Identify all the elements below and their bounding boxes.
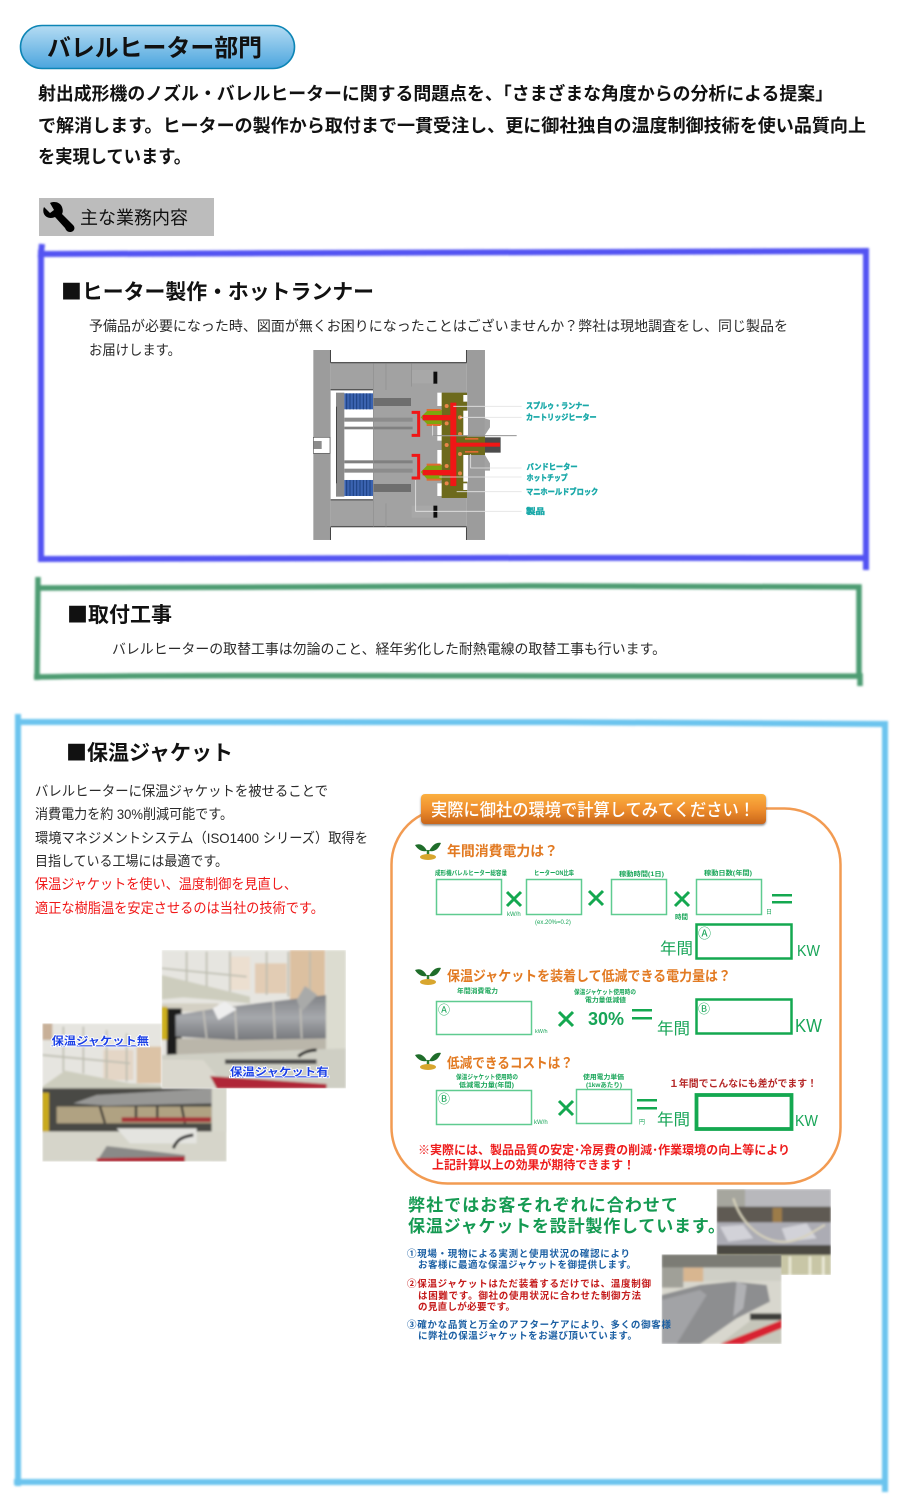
step 3: reducible cost: kW/h — [534, 1120, 548, 1126]
step 2: reducible power: kW/h — [535, 1029, 548, 1035]
step 1: annual power consumption: 日 — [766, 909, 772, 916]
photo: with jacket: 保温ジャケット有 — [230, 1065, 329, 1078]
note in red — [418, 1142, 790, 1172]
step 2: reducible power: 保温ジャケットを装着して低減できる電力量は？ — [447, 968, 731, 984]
icon: sprout — [415, 843, 441, 860]
diagram: hot runner mould cross-section — [313, 350, 598, 540]
body text — [89, 318, 788, 358]
section label: main services: 主な業務内容 — [80, 208, 188, 228]
step 1: annual power consumption: 年間消費電力は？ — [447, 843, 558, 859]
step 3: reducible cost: (1kwあたり) — [586, 1080, 622, 1089]
step 2: reducible power: 年間消費電力 — [457, 986, 498, 995]
body text — [35, 783, 368, 916]
intro text: で解消します。ヒーターの製作から取付まで一貫受注し、更に御社独自の温度制御技術を使い品質向上 — [38, 115, 866, 136]
panel: installation work — [34, 577, 860, 686]
step 2: reducible power: 保温ジャケット使用時の — [574, 987, 636, 996]
heading: insulation jacket: ■保温ジャケット — [66, 737, 233, 767]
diagram: hot runner mould cross-section: スプルゥ・ランナー — [526, 401, 589, 410]
photo: jacketed machine, top right — [717, 1189, 831, 1275]
step 3: reducible cost — [415, 1053, 819, 1130]
photo: with jacket — [162, 950, 346, 1088]
step 3: reducible cost: 保温ジャケット使用時の — [456, 1072, 518, 1081]
photo: jacketed barrel, lower — [662, 1254, 782, 1344]
step 2: reducible power: 電力量低減値 — [585, 995, 627, 1004]
calculator header banner: 実際に御社の環境で計算してみてください！ — [431, 800, 755, 820]
title pill — [20, 26, 294, 68]
point 3: ③確かな品質と万全のアフターケアにより、多くの御客様 — [407, 1319, 671, 1331]
note in red: ※実際には、製品品質の安定･冷房費の削減･作業環境の向上等により — [418, 1142, 790, 1157]
step 1: annual power consumption: 稼動時間(1日) — [619, 869, 664, 878]
step 3: reducible cost: 年間 — [657, 1111, 690, 1129]
step 1: annual power consumption: kW/h — [507, 912, 521, 918]
photo: without jacket — [42, 1023, 227, 1162]
step 3: reducible cost: 円 — [639, 1119, 645, 1126]
icon: wrench — [43, 202, 74, 232]
step 3: reducible cost: Ⓑ — [438, 1092, 450, 1106]
point 1: ①現場・現物による実測と使用状況の確認により — [407, 1248, 630, 1260]
step 1: annual power consumption: 稼動日数(年間) — [704, 868, 752, 877]
step 3: reducible cost: 使用電力単価 — [583, 1072, 625, 1081]
body text: お届けします。 — [89, 342, 181, 358]
step 1: annual power consumption: Ⓐ — [698, 926, 711, 941]
body text: 保温ジャケットを使い、温度制御を見直し、 — [35, 876, 297, 892]
icon: sprout — [415, 968, 441, 985]
point 3 — [407, 1319, 671, 1342]
body text: 予備品が必要になった時、図面が無くお困りになったことはございませんか？弊社は現地調査をし、同じ製品を — [89, 318, 788, 334]
panel: heater production and hot runner — [41, 244, 866, 570]
diagram: hot runner mould cross-section: マニホールドブロック — [526, 486, 598, 496]
step 3: reducible cost: KW — [795, 1113, 819, 1130]
panel: insulation jacket — [14, 714, 885, 1492]
step 1: annual power consumption: 時間 — [675, 912, 688, 921]
body text: 環境マネジメントシステム（ISO1400 シリーズ）取得を — [35, 830, 368, 846]
intro text: を実現しています。 — [38, 147, 191, 167]
step 1: annual power consumption: (ex.20%=0.2) — [535, 920, 571, 926]
step 1: annual power consumption: KW — [797, 943, 821, 960]
calculator header banner — [421, 794, 766, 824]
photos: jacketed machines — [662, 1189, 831, 1344]
photo pair: with and without jacket — [42, 950, 346, 1162]
step 1: annual power consumption: ヒーターON比率 — [534, 868, 574, 877]
intro text — [38, 83, 866, 167]
heading: installation: ■取付工事 — [67, 599, 172, 629]
point 2: の見直しが必要です。 — [418, 1301, 515, 1313]
note in red: 上記計算以上の効果が期待できます！ — [432, 1157, 635, 1172]
step 2: reducible power: KW — [795, 1016, 822, 1036]
diagram: hot runner mould cross-section: バンドヒーター — [527, 461, 578, 471]
panel: calculator — [392, 794, 840, 1184]
step 2: reducible power: 年間 — [657, 1020, 690, 1038]
diagram: hot runner mould cross-section: カートリッジヒーター — [526, 412, 597, 422]
body text: 適正な樹脂温を安定させるのは当社の技術です。 — [35, 900, 324, 916]
intro text: 射出成形機のノズル・バレルヒーターに関する問題点を、「さまざまな角度からの分析による提案」 — [38, 83, 833, 104]
section label: main services — [39, 198, 214, 236]
step 2: reducible power: Ⓐ — [438, 1003, 450, 1017]
step 3: reducible cost: 低減できるコストは？ — [447, 1055, 573, 1071]
step 2: reducible power: Ⓑ — [698, 1002, 710, 1016]
heading: custom design: 弊社ではお客それぞれに合わせて — [408, 1195, 678, 1215]
step 2: reducible power: 30% — [588, 1009, 624, 1029]
point 1: お客様に最適な保温ジャケットを御提供します。 — [418, 1259, 636, 1271]
block: custom jacket design — [407, 1189, 831, 1344]
photo: without jacket: 保温ジャケット無 — [52, 1034, 149, 1047]
step 3: reducible cost: １年間でこんなにも差がでます！ — [669, 1077, 817, 1090]
title pill: バレルヒーター部門 — [47, 35, 262, 62]
point 2 — [407, 1278, 651, 1313]
body text: 消費電力を約 30%削減可能です。 — [35, 806, 233, 822]
diagram: hot runner mould cross-section: 製品 — [526, 506, 545, 516]
step 2: reducible power — [415, 968, 822, 1038]
body text: バレルヒーターの取替工事は勿論のこと、経年劣化した耐熱電線の取替工事も行います。 — [112, 641, 666, 657]
step 1: annual power consumption: 年間 — [660, 940, 693, 958]
point 2: は困難です。御社の使用状況に合わせた制御方法 — [418, 1290, 641, 1302]
icon: sprout — [415, 1053, 441, 1070]
heading: heater production: ■ヒーター製作・ホットランナー — [61, 276, 374, 306]
point 3: に弊社の保温ジャケットをお選び頂いています。 — [418, 1330, 637, 1342]
body text: バレルヒーターに保温ジャケットを被せることで — [35, 783, 328, 799]
step 1: annual power consumption: 成形機バレルヒーター総容量 — [435, 868, 507, 877]
step 3: reducible cost: 低減電力量(年間) — [459, 1080, 514, 1089]
heading: custom design — [408, 1195, 725, 1236]
heading: custom design: 保温ジャケットを設計製作しています。 — [408, 1217, 725, 1236]
diagram: hot runner mould cross-section: ホットチップ — [527, 474, 568, 483]
body text: 目指している工場には最適です。 — [35, 853, 228, 869]
point 2: ②保温ジャケットはただ装着するだけでは、温度制御 — [407, 1278, 651, 1290]
point 1 — [407, 1248, 636, 1271]
step 1: annual power consumption — [415, 843, 821, 960]
